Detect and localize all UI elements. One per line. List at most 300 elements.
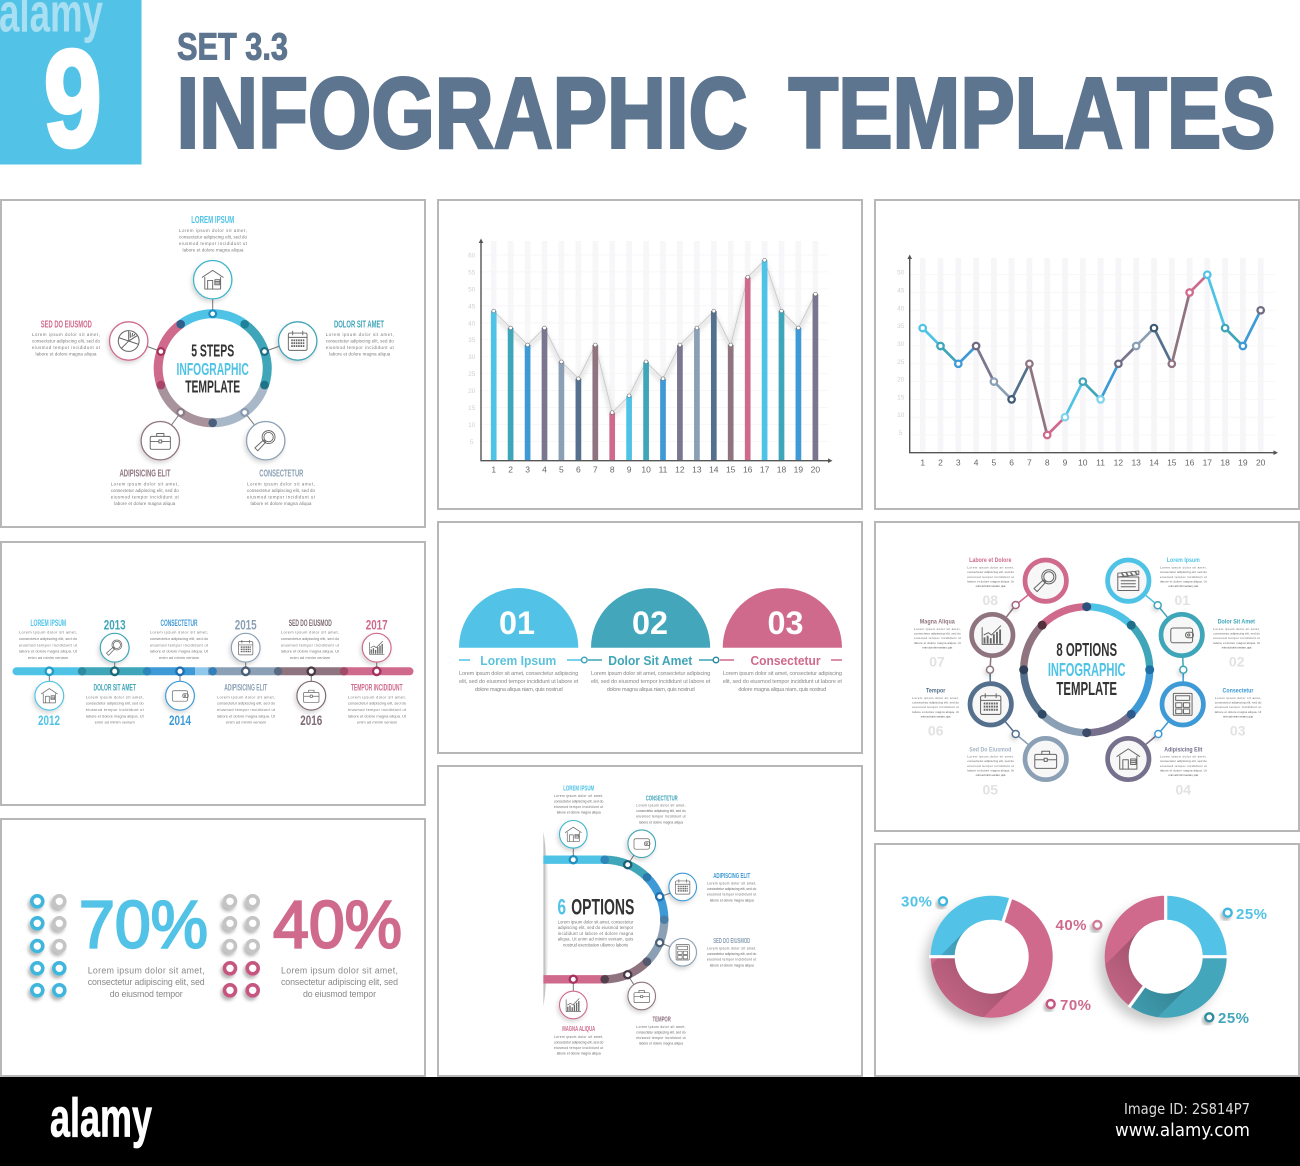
text: sed do eiusmod: eiusmod tempor incididunt ut [281,642,340,647]
icon: clapper [1108,560,1149,601]
heading: consectetur: Consectetur [750,653,821,668]
header: number badge [0,0,142,176]
text: adipisicing elit [217,683,276,725]
option 06 text [912,688,959,738]
option 06 text: enim ad minim veniam, quis [921,715,951,719]
option text: tempor: consectetur adipiscing elit, sed do [636,1031,686,1035]
step heading and text: lorem ipsum: LOREM IPSUM [191,214,234,226]
text: sed do eiusmod: consectetur adipiscing elit, sed do [281,636,339,641]
image id: Image ID: 2S814P7 [1124,1100,1250,1118]
option 07 text [914,619,961,669]
text: tempor incididunt [348,683,407,725]
x axis labels: 13 [692,464,702,474]
connectors [146,299,280,427]
option 06 text: 06 [928,722,944,738]
milestone 2016 [297,681,326,728]
half circle 03 [723,588,842,648]
text: column 1: dolore magna aliqua niam, quis nostrud [475,687,563,693]
step heading and text: lorem ipsum [179,214,248,253]
option 01 text: enim ad minim veniam, quis [1168,584,1199,588]
option 03 text: labore et dolore magna aliqua. Ut [1215,710,1262,714]
y axis labels: 5 [899,430,903,437]
text: tempor incididunt: TEMPOR INCIDIDUNT [351,683,403,694]
text 70%: do eiusmod tempor [110,989,183,999]
option 08 text: consectetur adipiscing elit, sed do [967,570,1014,574]
text: sed do eiusmod: SED DO EIUSMOD [289,618,332,629]
text: adipisicing elit: eiusmod tempor incididunt ut [217,707,276,712]
text: tempor incididunt: labore et dolore magna aliqua. Ut [348,713,407,718]
centre heading: INFOGRAPHIC [177,359,249,379]
milestone 2015 [231,617,260,662]
option 02 text: Dolor Sit Amet [1218,619,1255,625]
option 01 text: eiusmod tempor incididunt ut [1160,575,1207,579]
text: lorem ipsum: enim ad minim veniam [28,655,68,660]
option text: sed do eiusmod: labore et dolore magna aliqua [710,963,754,967]
centre text: aliqua. Ut enim ad minim veniam, quis [558,937,633,942]
centre heading: TEMPLATE [185,376,240,396]
option 05 text: 05 [983,781,998,797]
label 25% bottom: 25% [1218,1010,1250,1027]
option 07 text: consectetur adipiscing elit, sed do [914,631,961,635]
step heading and text: sed do eiusmod: labore et dolore magna aliqua [36,351,97,356]
dot matrix 70% [32,896,65,996]
option 02 text: Lorem ipsum dolor sit amet, [1213,627,1260,631]
option 01 text: Lorem Ipsum [1167,558,1200,564]
y axis labels: 20 [897,377,905,384]
step heading and text: consectetur: eiusmod tempor incididunt ut [247,494,316,500]
x axis labels: 12 [675,464,685,474]
panel: timeline [1,542,425,805]
text: column 3: elit, sed do eiusmod tempor incididunt ut labore et [723,679,842,685]
step heading and text: adipisicing elit: labore et dolore magna aliqua [114,501,176,506]
x axis labels: 16 [1185,457,1195,467]
half circle 01 [459,588,578,648]
y axis labels: 30 [897,341,905,348]
y axis labels: 40 [468,320,476,327]
y axis labels: 45 [897,288,905,294]
text 40% [281,965,398,999]
text: adipisicing elit: labore et dolore magna aliqua. Ut [217,713,276,718]
text: tempor incididunt: Lorem ipsum dolor sit amet, [348,694,406,699]
step heading and text: lorem ipsum: consectetur adipiscing elit, sed do [179,235,248,240]
icon: chart [972,614,1013,656]
option 02 text: eiusmod tempor incididunt ut [1213,636,1260,640]
option text: magna aliqua [554,1024,603,1056]
milestone 2016: 2016 [300,713,323,728]
text: dolor sit amet: enim ad minim veniam [95,720,135,725]
option 02 text: consectetur adipiscing elit, sed do [1213,631,1260,635]
curved band [543,860,664,979]
icon: magnifier [1025,560,1066,601]
divider lines and nodes [459,657,842,663]
connectors [573,848,671,991]
x axis labels: 20 [811,464,820,474]
text: dolor sit amet: consectetur adipiscing elit, sed do [86,701,144,706]
panel: 6 options [438,766,862,1076]
centre heading: 8 OPTIONS [1056,639,1117,660]
y axis labels: 10 [468,422,476,429]
x axis labels: 18 [777,464,786,474]
centre text: Lorem ipsum dolor sit amet, consectetur [558,920,634,924]
option 05 text: Sed Do Eiusmod [969,747,1012,753]
text 40%: consectetur adipiscing elit, sed [281,977,398,987]
icon: calendar [278,322,317,360]
text: sed do eiusmod: Lorem ipsum dolor sit amet, [281,630,339,635]
heading: dolor sit amet: Dolor Sit Amet [608,653,693,668]
step heading and text: dolor sit amet: Lorem ipsum dolor sit amet, [326,332,394,337]
bar top markers [492,258,817,414]
milestone 2012 [35,681,64,728]
option 03 text [1215,688,1262,738]
option 05 text [967,747,1014,797]
milestone 2014: 2014 [169,713,191,728]
step heading and text: sed do eiusmod: Lorem ipsum dolor sit amet, [32,332,100,337]
option 03 text: consectetur adipiscing elit, sed do [1215,700,1262,704]
step heading and text: dolor sit amet: eiusmod tempor incididunt ut [326,345,394,350]
option 04 text: eiusmod tempor incididunt ut [1160,764,1207,768]
centre heading [558,894,634,919]
text: column 3: Lorem ipsum dolor sit amet, consectetur adipiscing [723,671,842,677]
text: consectetur: enim ad minim veniam [159,655,199,660]
option 01 text: Lorem ipsum dolor sit amet, [1160,565,1207,569]
option 06 text: eiusmod tempor incididunt ut [912,705,959,709]
x axis labels: 19 [1238,457,1248,467]
option text: tempor: TEMPOR [653,1014,671,1023]
option 01 text: labore et dolore magna aliqua. Ut [1160,580,1207,584]
text: adipisicing elit: consectetur adipiscing elit, sed do [217,701,275,706]
label 25% top: 25% [1236,906,1268,923]
milestone 2012: 2012 [38,713,60,728]
ring junction dots [157,320,269,427]
icon: wallet [1161,614,1202,656]
option 05 text: labore et dolore magna aliqua. Ut [967,769,1014,773]
text: adipisicing elit: Lorem ipsum dolor sit amet, [217,694,275,699]
step heading and text: adipisicing elit: Lorem ipsum dolor sit amet, [111,482,179,486]
panel: percentages [1,819,425,1076]
text: tempor incididunt: enim ad minim veniam [357,720,397,725]
option text: tempor: eiusmod tempor incididunt ut [636,1036,686,1040]
text: tempor incididunt: eiusmod tempor incididunt ut [348,707,407,712]
x axis labels: 7 [593,464,598,474]
option 06 text: Lorem ipsum dolor sit amet, [912,696,959,700]
icon: calculator [669,938,696,966]
option 08 text: labore et dolore magna aliqua. Ut [967,580,1014,584]
text: tempor incididunt: consectetur adipiscing elit, sed do [348,701,406,706]
header: title [176,58,1276,170]
option 01 text: 01 [1175,592,1190,608]
y axis labels: 35 [897,323,905,330]
text: column 2: dolore magna aliqua niam, quis nostrud [607,687,695,693]
icon: magnifier [247,422,285,460]
link lines [990,581,1183,759]
x axis labels: 11 [659,464,668,474]
option text: lorem ipsum: Lorem ipsum dolor sit amet, [554,794,603,798]
step heading and text: sed do eiusmod: consectetur adipiscing elit, sed do [32,338,101,343]
footer logo: alamy [50,1086,152,1148]
option 05 text: Lorem ipsum dolor sit amet, [967,754,1014,758]
option 02 text: labore et dolore magna aliqua. Ut [1213,641,1260,645]
icon: house [1108,738,1149,780]
y axis labels: 55 [468,269,476,276]
header: number badge: 9 [44,22,102,176]
option 03 text: Consectetur [1222,688,1254,694]
x axis labels: 17 [760,464,770,474]
step heading and text: adipisicing elit: ADIPISICING ELIT [120,468,171,480]
y axis labels [897,270,905,437]
grid stripes [494,241,815,460]
step heading and text: adipisicing elit [111,468,179,506]
step heading and text: lorem ipsum: Lorem ipsum dolor sit amet, [179,228,247,233]
option 03 text: enim ad minim veniam, quis [1223,715,1253,719]
option 02 text [1213,619,1260,669]
option 01 text: consectetur adipiscing elit, sed do [1160,570,1207,574]
option text: consectetur: Lorem ipsum dolor sit amet, [636,804,686,808]
x axis labels: 6 [1009,457,1014,467]
text 70% [88,965,205,999]
option 08 text: eiusmod tempor incididunt ut [967,575,1014,579]
panel: line chart [875,200,1299,509]
panel: 5 steps circle [1,200,425,527]
y axis labels: 60 [468,252,476,260]
panel: three half circles [438,522,862,753]
option 08 text: Lorem ipsum dolor sit amet, [967,565,1014,569]
line segments [923,275,1261,435]
icon: chart [560,991,587,1019]
milestone 2013: 2013 [104,617,126,632]
text: sed do eiusmod [281,618,340,660]
option 05 text: eiusmod tempor incididunt ut [967,764,1014,768]
x axis labels: 19 [794,464,803,474]
panel: donut charts [875,844,1299,1076]
x axis labels: 14 [1149,457,1159,467]
milestone 2017 [362,617,391,662]
text: lorem ipsum [19,618,78,660]
step heading and text: consectetur [247,468,316,506]
step heading and text: sed do eiusmod [32,318,101,356]
x axis labels: 8 [1045,457,1050,467]
step heading and text: dolor sit amet: DOLOR SIT AMET [334,318,384,330]
trend shadow [494,264,815,416]
icon: house [560,820,587,848]
step heading and text: adipisicing elit: eiusmod tempor incididunt ut [111,494,179,500]
option 06 text: consectetur adipiscing elit, sed do [912,700,959,704]
milestone 2017: 2017 [366,617,388,632]
option 07 text: labore et dolore magna aliqua. Ut [914,641,961,645]
text: lorem ipsum: eiusmod tempor incididunt ut [19,642,78,647]
option 02 text: 02 [1229,653,1245,669]
centre heading: TEMPLATE [1056,678,1117,699]
option text: lorem ipsum: consectetur adipiscing elit, sed do [554,800,603,804]
header: subtitle: SET 3.3 [177,26,288,68]
step heading and text: consectetur: Lorem ipsum dolor sit amet, [247,482,315,486]
option text: adipiscing elit: consectetur adipiscing elit, sed do [707,887,756,891]
icon: briefcase [1025,738,1066,780]
x axis labels: 10 [1078,457,1088,467]
donut chart left [920,896,1053,1030]
y axis labels: 5 [470,439,474,446]
page fold shadow [544,832,550,1006]
icon: calculator [1162,684,1203,725]
website: www.alamy.com [1115,1120,1250,1141]
option text: adipiscing elit: eiusmod tempor incididunt ut [707,893,756,897]
half circle 03: 03 [768,605,804,641]
bars [494,260,815,460]
x axis labels: 6 [576,464,581,474]
label 30% [901,894,947,910]
text: sed do eiusmod: enim ad minim veniam [290,655,330,660]
text: column 3 [723,671,842,693]
y axis labels: 15 [468,405,476,412]
label 40% [1056,917,1101,934]
option text: sed do eiusmod: Lorem ipsum dolor sit amet, [707,946,756,950]
axes [479,238,832,463]
option 04 text: labore et dolore magna aliqua. Ut [1160,769,1207,773]
option 08 text [967,558,1014,608]
option text: adipiscing elit: Lorem ipsum dolor sit amet, [707,882,756,886]
band nodes [570,856,663,983]
text: dolor sit amet: eiusmod tempor incididunt ut [86,707,145,712]
x axis labels: 14 [709,464,719,474]
option text: lorem ipsum [554,783,603,815]
ring junction dots [1019,602,1154,737]
text 40%: do eiusmod tempor [303,989,376,999]
text: consectetur: CONSECTETUR [160,618,198,629]
option text: sed do eiusmod: consectetur adipiscing elit, sed do [707,952,756,956]
heading: lorem ipsum: Lorem Ipsum [480,653,556,668]
text: column 1: Lorem ipsum dolor sit amet, consectetur adipiscing [459,671,578,677]
option text: adipiscing elit: labore et dolore magna aliqua [710,898,754,902]
option text: consectetur: CONSECTETUR [646,793,678,802]
text: consectetur: labore et dolore magna aliqua. Ut [150,649,209,654]
text: adipisicing elit: enim ad minim veniam [226,720,266,725]
x axis labels: 9 [627,464,632,474]
footer bar [0,1077,1300,1166]
x axis labels: 3 [525,464,530,474]
option 07 text: enim ad minim veniam, quis [922,646,953,650]
text: lorem ipsum: LOREM IPSUM [30,618,66,629]
text: consectetur [150,618,209,660]
text: lorem ipsum: Lorem ipsum dolor sit amet, [19,630,77,635]
option 04 text: enim ad minim veniam, quis [1168,773,1199,777]
x axis labels: 9 [1063,457,1068,467]
step heading and text: consectetur: CONSECTETUR [259,468,304,480]
step heading and text: lorem ipsum: eiusmod tempor incididunt ut [179,241,248,246]
option 03 text: Lorem ipsum dolor sit amet, [1215,696,1262,700]
centre heading: 6 [558,894,566,919]
option 03 text: 03 [1230,722,1246,738]
axes [907,254,1278,455]
y axis labels: 30 [468,354,476,361]
y axis labels: 50 [897,270,905,277]
option 07 text: Lorem ipsum dolor sit amet, [914,627,961,631]
icon: calendar [669,873,696,901]
timeline nodes [46,668,380,675]
x axis labels: 12 [1114,457,1123,467]
option text: lorem ipsum: labore et dolore magna aliqua [557,811,601,815]
milestone 2014 [166,681,194,728]
option text: sed do eiusmod [707,936,756,967]
option 03 text: eiusmod tempor incididunt ut [1215,705,1262,709]
y axis labels: 25 [897,359,905,366]
option 06 text: Tempor [926,688,946,694]
x axis labels: 18 [1220,457,1230,467]
y axis labels [468,252,476,446]
timeline bar [16,667,410,675]
x axis labels: 2 [508,464,513,474]
grid stripes [923,258,1261,452]
text 70%: consectetur adipiscing elit, sed [88,977,205,987]
y axis labels: 15 [897,394,905,401]
option 06 text: labore et dolore magna aliqua. Ut [912,710,959,714]
x axis labels [491,464,820,474]
text: consectetur: eiusmod tempor incididunt ut [150,642,209,647]
x axis labels: 5 [559,464,564,474]
milestone 2015: 2015 [235,617,257,632]
band junctions [600,855,669,984]
big number 40%: 40% [273,888,402,962]
x axis labels: 5 [992,457,997,467]
dot matrix 40% [224,896,258,996]
option text: consectetur: labore et dolore magna aliqua [639,820,683,824]
x axis labels: 7 [1027,457,1032,467]
option 08 text: Labore et Dolore [969,558,1012,564]
y axis labels: 40 [897,305,905,312]
step heading and text: consectetur: labore et dolore magna aliqua [250,501,312,506]
x axis labels: 17 [1203,457,1212,467]
ring nodes [158,310,268,416]
icon: wallet [628,830,656,858]
text: sed do eiusmod: labore et dolore magna aliqua. Ut [281,649,340,654]
y axis labels: 45 [468,303,476,310]
centre heading [177,341,249,396]
option text: magna aliqua: Lorem ipsum dolor sit amet, [554,1035,603,1039]
option 08 text: enim ad minim veniam, quis [976,584,1006,588]
text: adipisicing elit: ADIPISICING ELIT [224,683,267,694]
option text: magna aliqua: labore et dolore magna aliqua [557,1052,601,1056]
x axis labels: 15 [1167,457,1177,467]
x axis labels: 11 [1096,457,1105,467]
y axis labels: 25 [468,371,476,378]
x axis labels: 20 [1256,457,1266,467]
label 30%: 30% [901,894,933,910]
icon: house [194,260,232,299]
option 02 text: enim ad minim veniam, quis [1222,646,1252,650]
option 07 text: Magna Aliqua [920,619,955,625]
x axis labels: 15 [726,464,736,474]
y axis labels: 10 [897,412,905,419]
icon: briefcase [141,422,180,460]
option 05 text: consectetur adipiscing elit, sed do [967,759,1014,763]
milestone 2013 [100,617,129,662]
option text: magna aliqua: MAGNA ALIQUA [562,1024,596,1033]
x axis labels: 2 [938,457,943,467]
step heading and text: dolor sit amet: consectetur adipiscing elit, sed do [326,338,394,343]
x axis labels: 1 [920,457,925,467]
option text: consectetur [636,793,686,824]
text: column 2 [591,671,711,693]
option text: lorem ipsum: eiusmod tempor incididunt ut [554,805,603,809]
text: lorem ipsum: consectetur adipiscing elit, sed do [19,636,77,641]
option text: tempor: Lorem ipsum dolor sit amet, [636,1025,686,1029]
option 08 text: 08 [983,592,998,608]
option 07 text: 07 [929,653,945,669]
text: consectetur: consectetur adipiscing elit, sed do [150,636,208,641]
text: consectetur: Lorem ipsum dolor sit amet, [150,630,208,635]
option 04 text: 04 [1176,781,1191,797]
y axis labels: 35 [468,337,476,344]
x axis labels: 4 [974,457,979,467]
centre heading [1048,639,1126,699]
